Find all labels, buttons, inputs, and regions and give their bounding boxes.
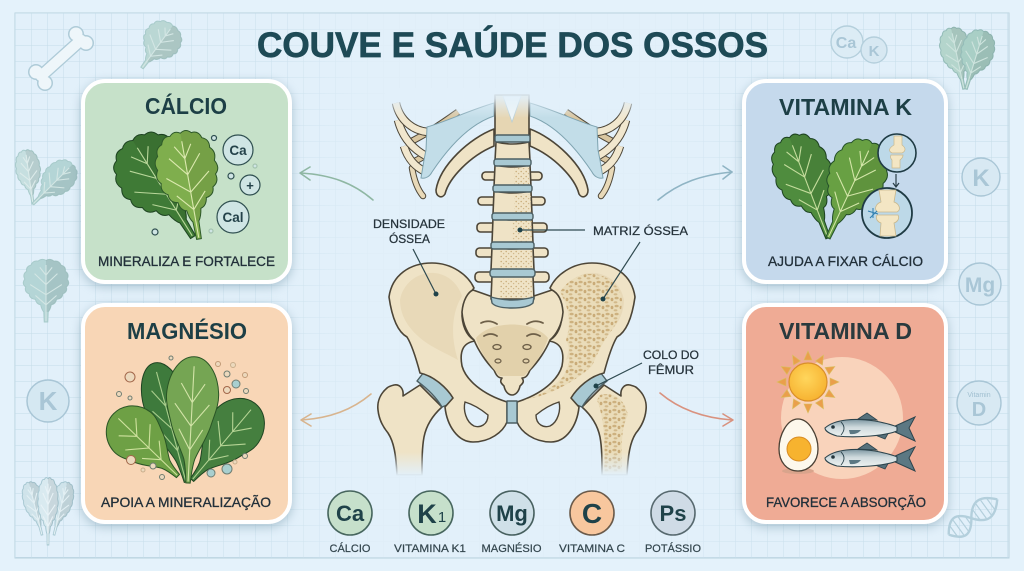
nutrient: vitamina K1: K <box>417 499 437 529</box>
title: COUVE E SAÚDE DOS OSSOS <box>257 25 768 65</box>
femur fade <box>370 452 660 476</box>
icon: K bubble right: K <box>972 165 990 192</box>
icon: faded leaves left <box>13 148 84 215</box>
nutrient: calcio: Ca <box>336 501 365 526</box>
caption: magnesio: APOIA A MINERALIZAÇÃO <box>101 494 271 510</box>
icon: mineral dots <box>116 356 248 480</box>
icon: sun <box>777 351 839 413</box>
heading: calcio: CÁLCIO <box>145 92 227 119</box>
arrow: to magnesio <box>301 394 371 426</box>
arrow: between joints <box>893 174 899 187</box>
caption: calcio: MINERALIZA E FORTALECE <box>98 253 275 269</box>
nutrient: potassio: Ps <box>660 501 686 526</box>
nutrient: vitamina K1: 1 <box>438 509 446 526</box>
icon: Ca and K bubbles: Ca <box>836 35 856 52</box>
panel: vitamina D <box>744 305 946 522</box>
icon: kale leaves <box>762 126 899 250</box>
pelvis <box>378 263 646 475</box>
arrow: to vitamina D <box>660 393 733 426</box>
icon: egg <box>779 419 818 474</box>
nutrient: vitamina C: C <box>582 498 602 529</box>
heading: vitamina D: VITAMINA D <box>779 318 912 344</box>
icon: joint top <box>878 134 916 172</box>
nutrient: magnesio <box>482 491 542 555</box>
icon: bone <box>28 26 94 91</box>
icon: spinach leaves <box>95 355 276 497</box>
arrow: to vitamina K <box>658 166 732 200</box>
caption: vitamina K: AJUDA A FIXAR CÁLCIO <box>768 253 923 269</box>
label: colo do femur: COLO DO <box>643 348 699 362</box>
background glow <box>781 357 903 479</box>
icon: DNA helix <box>943 491 1003 543</box>
top fade <box>385 88 639 118</box>
nutrient: calcio: CÁLCIO <box>330 542 371 555</box>
icon: K bubble left: K <box>39 386 58 416</box>
ribs <box>396 103 628 197</box>
icon: fish <box>825 413 915 471</box>
nutrient: magnesio: Mg <box>496 501 528 526</box>
caption: vitamina D: FAVORECE A ABSORÇÃO <box>766 494 926 510</box>
icon: faded leaf mid left <box>23 259 69 322</box>
icon: K bubble right <box>962 158 1000 196</box>
label: densidade ossea: ÓSSEA <box>389 231 430 246</box>
label: densidade ossea: DENSIDADE <box>373 217 445 231</box>
icon: Ca and K bubbles: K <box>869 43 880 60</box>
nutrient: potassio: POTÁSSIO <box>645 542 701 555</box>
panel: calcio <box>83 81 290 282</box>
panel: vitamina K <box>744 81 946 282</box>
heading: magnesio: MAGNÉSIO <box>127 317 247 344</box>
icon: vitamin D bubble: D <box>972 399 986 421</box>
nutrient: magnesio: MAGNÉSIO <box>482 542 542 555</box>
heading: vitamina K: VITAMINA K <box>779 94 912 120</box>
icon: kale leaves <box>100 119 229 257</box>
icon: faded kale bottom left <box>19 478 77 545</box>
icon: Ca and K bubbles <box>831 26 887 63</box>
icon: Mg bubble: Mg <box>965 274 995 297</box>
icon: vitamin D bubble <box>957 381 1001 425</box>
nutrient: vitamina K1: VITAMINA K1 <box>394 543 466 555</box>
nutrient: potassio <box>645 491 701 555</box>
icon: mineral bubbles: Cal <box>222 210 244 225</box>
label: matriz ossea: MATRIZ ÓSSEA <box>593 223 688 238</box>
sacrum <box>462 290 563 395</box>
icon: joint bottom <box>862 188 912 238</box>
icon: mineral bubbles: + <box>246 178 254 193</box>
label: colo do femur <box>594 348 699 388</box>
icon: mineral bubbles: Ca <box>229 143 247 158</box>
nutrient: vitamina C: VITAMINA C <box>559 543 625 555</box>
sternum tip <box>503 96 521 122</box>
label: densidade ossea <box>373 217 445 296</box>
lumbar spine <box>475 95 549 308</box>
arrow: to calcio <box>300 167 373 200</box>
label: colo do femur: FÊMUR <box>648 362 694 377</box>
nutrient: calcio <box>328 491 372 555</box>
icon: mineral bubbles <box>152 135 260 235</box>
skeleton <box>370 88 660 476</box>
icon: vitamin D bubble: Vitamin <box>967 392 991 399</box>
icon: K bubble left <box>27 380 69 422</box>
icon: faded leaf top <box>127 14 189 79</box>
label: matriz ossea <box>518 223 688 302</box>
panel: magnesio <box>83 305 290 522</box>
icon: faded leaves right <box>936 25 1000 94</box>
icon: Mg bubble <box>959 263 1001 305</box>
nutrient: vitamina K1 <box>394 491 466 555</box>
nutrient: vitamina C <box>559 491 625 555</box>
nutrient legend <box>328 491 701 555</box>
